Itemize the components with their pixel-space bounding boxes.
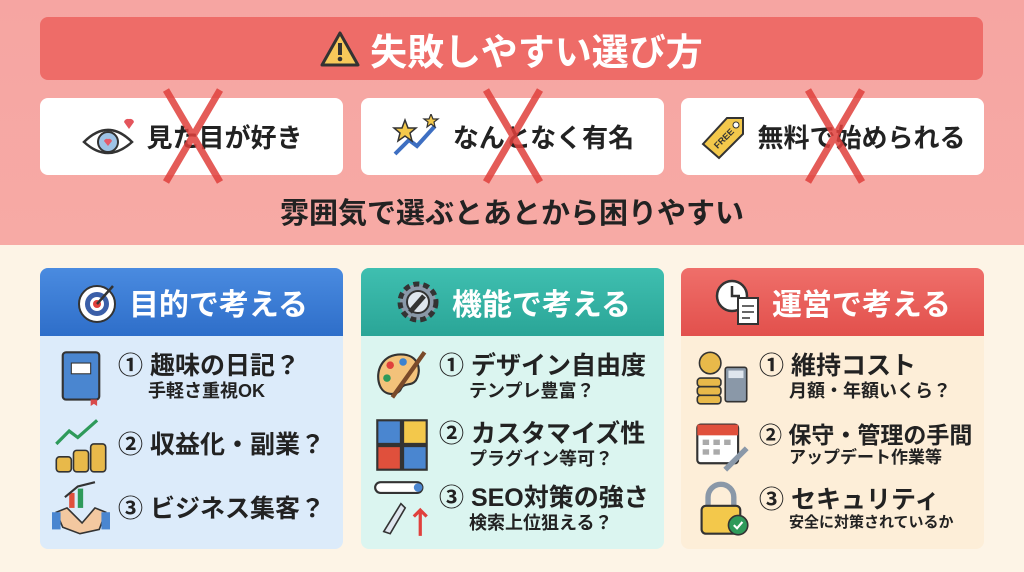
- item 1: テンプレ豊富？: [469, 381, 594, 401]
- item 3: ③ SEO対策の強さ: [439, 484, 649, 512]
- item 1: ① 趣味の日記？: [118, 352, 300, 380]
- title: [40, 17, 983, 80]
- top band: [0, 0, 1024, 245]
- item 2: [55, 419, 325, 473]
- item 3: ③ セキュリティ: [759, 486, 939, 514]
- header: features: [361, 268, 664, 336]
- item 2: プラグイン等可？: [469, 449, 613, 469]
- item 3: [52, 481, 325, 534]
- item 2: ② 収益化・副業？: [118, 431, 325, 459]
- item 3: ③ ビジネス集客？: [118, 495, 325, 523]
- card: looks: [40, 98, 343, 175]
- card: free: [681, 98, 984, 175]
- panel: purpose: [40, 268, 343, 549]
- header: features: 機能で考える: [452, 289, 631, 322]
- item 1: [696, 352, 951, 405]
- card: looks: 見た目が好き: [146, 123, 302, 153]
- item 2: ② 保守・管理の手間: [759, 422, 972, 448]
- item 3: 安全に対策されているか: [789, 514, 954, 531]
- item 2: [376, 419, 645, 471]
- header: operation: 運営で考える: [772, 289, 951, 322]
- item 2: アップデート作業等: [789, 448, 942, 467]
- cross marks: [163, 88, 865, 184]
- item 2: [696, 422, 972, 472]
- subtitle: 雰囲気で選ぶとあとから困りやすい: [280, 198, 744, 230]
- card: free: 無料で始められる: [757, 123, 966, 153]
- card: famous: なんとなく有名: [453, 123, 634, 153]
- header: purpose: 目的で考える: [129, 289, 308, 322]
- panel: features: [361, 268, 664, 549]
- item 3: 検索上位狙える？: [469, 513, 612, 533]
- item 1: ① 維持コスト: [759, 352, 916, 380]
- card: famous: [361, 98, 664, 175]
- card: free: FREE: [712, 126, 736, 150]
- panel: operation: [681, 268, 984, 549]
- title: 失敗しやすい選び方: [370, 32, 703, 72]
- item 3: [374, 481, 649, 536]
- header: purpose: [40, 268, 343, 336]
- item 1: ① デザイン自由度: [439, 352, 646, 380]
- item 1: 手軽さ重視OK: [148, 381, 265, 401]
- header: operation: [681, 268, 984, 336]
- item 3: [700, 482, 954, 536]
- item 1: 月額・年額いくら？: [789, 381, 951, 401]
- item 1: [377, 351, 646, 401]
- item 1: [62, 351, 300, 406]
- item 2: ② カスタマイズ性: [439, 420, 645, 448]
